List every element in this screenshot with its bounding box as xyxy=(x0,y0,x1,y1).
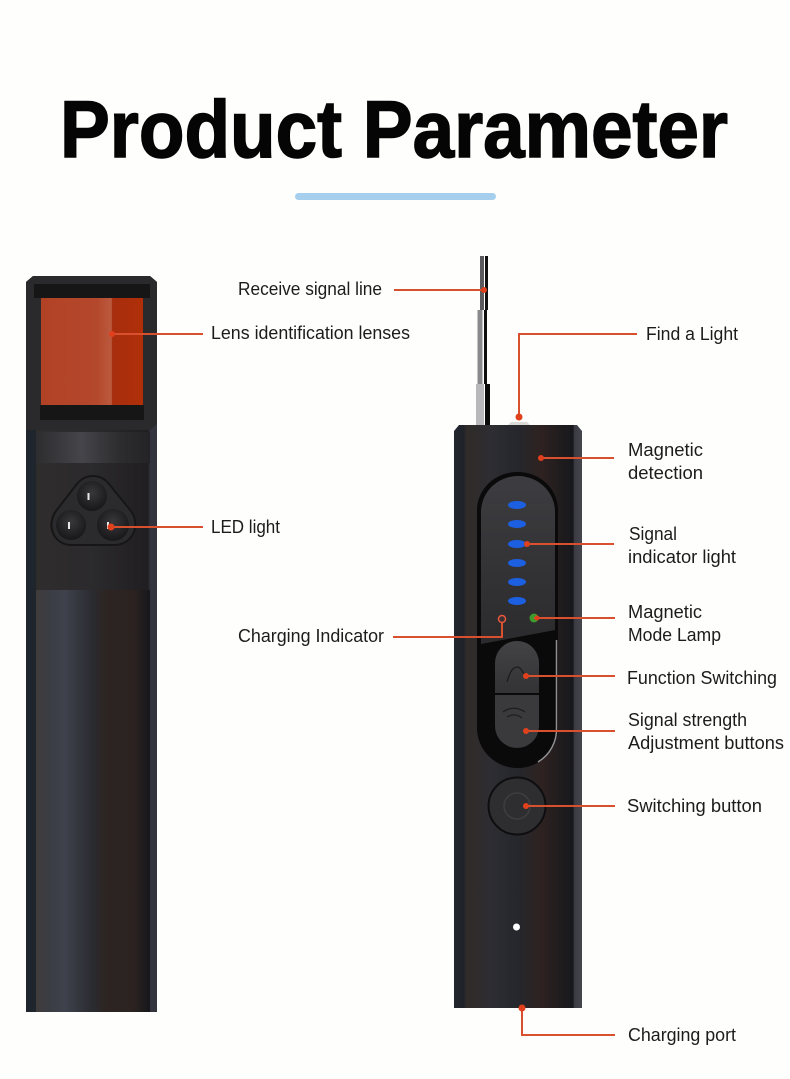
label: magnetic detection: Magnetic xyxy=(628,440,703,460)
label: magnetic mode lamp xyxy=(628,602,721,645)
label: charging port: Charging port xyxy=(628,1025,736,1045)
label: signal strength adjustment buttons xyxy=(628,710,784,753)
led top xyxy=(77,481,107,511)
label: magnetic mode lamp: Magnetic xyxy=(628,602,702,622)
device: front view xyxy=(454,256,582,1008)
label: signal indicator light: indicator light xyxy=(628,547,736,567)
lower panel xyxy=(36,590,150,1012)
label: LED light: LED light xyxy=(211,517,280,537)
device: rear view xyxy=(26,276,157,1012)
title: Product Parameter xyxy=(60,85,728,175)
red lens xyxy=(41,298,143,405)
led left xyxy=(56,510,86,540)
label: function switching: Function Switching xyxy=(627,668,777,688)
label: signal strength adjustment buttons: Signal strength xyxy=(628,710,747,730)
label: charging indicator: Charging Indicator xyxy=(238,626,384,646)
rear body xyxy=(26,276,157,1012)
title underline xyxy=(295,193,496,200)
antenna xyxy=(476,256,490,425)
label: magnetic detection xyxy=(628,440,703,483)
front body xyxy=(454,425,582,1008)
led cluster xyxy=(51,476,135,545)
charging indicator dot xyxy=(498,616,506,622)
label: switching button: Switching button xyxy=(627,796,762,816)
signal button xyxy=(495,695,539,748)
callout dots xyxy=(108,287,544,1012)
label: find a light: Find a Light xyxy=(646,324,738,344)
label: signal indicator light xyxy=(628,524,736,567)
upper strip xyxy=(36,432,150,463)
white status dot xyxy=(513,924,520,930)
label: receive signal line: Receive signal line xyxy=(238,279,382,299)
led right xyxy=(97,509,129,541)
label: signal strength adjustment buttons: Adjustment buttons xyxy=(628,733,784,753)
top light xyxy=(508,422,530,425)
label: magnetic detection: detection xyxy=(628,463,703,483)
power button xyxy=(488,778,546,834)
label: magnetic mode lamp: Mode Lamp xyxy=(628,625,721,645)
lens housing xyxy=(26,276,157,430)
blue signal lights xyxy=(508,501,526,605)
callout lines xyxy=(111,290,637,1035)
indicator panel frame xyxy=(477,472,558,768)
green lamp xyxy=(530,614,538,622)
indicator panel xyxy=(481,476,555,644)
label: signal indicator light: Signal xyxy=(629,524,677,544)
function button xyxy=(495,641,539,693)
label: lens identification lenses: Lens identification lenses xyxy=(211,323,410,343)
